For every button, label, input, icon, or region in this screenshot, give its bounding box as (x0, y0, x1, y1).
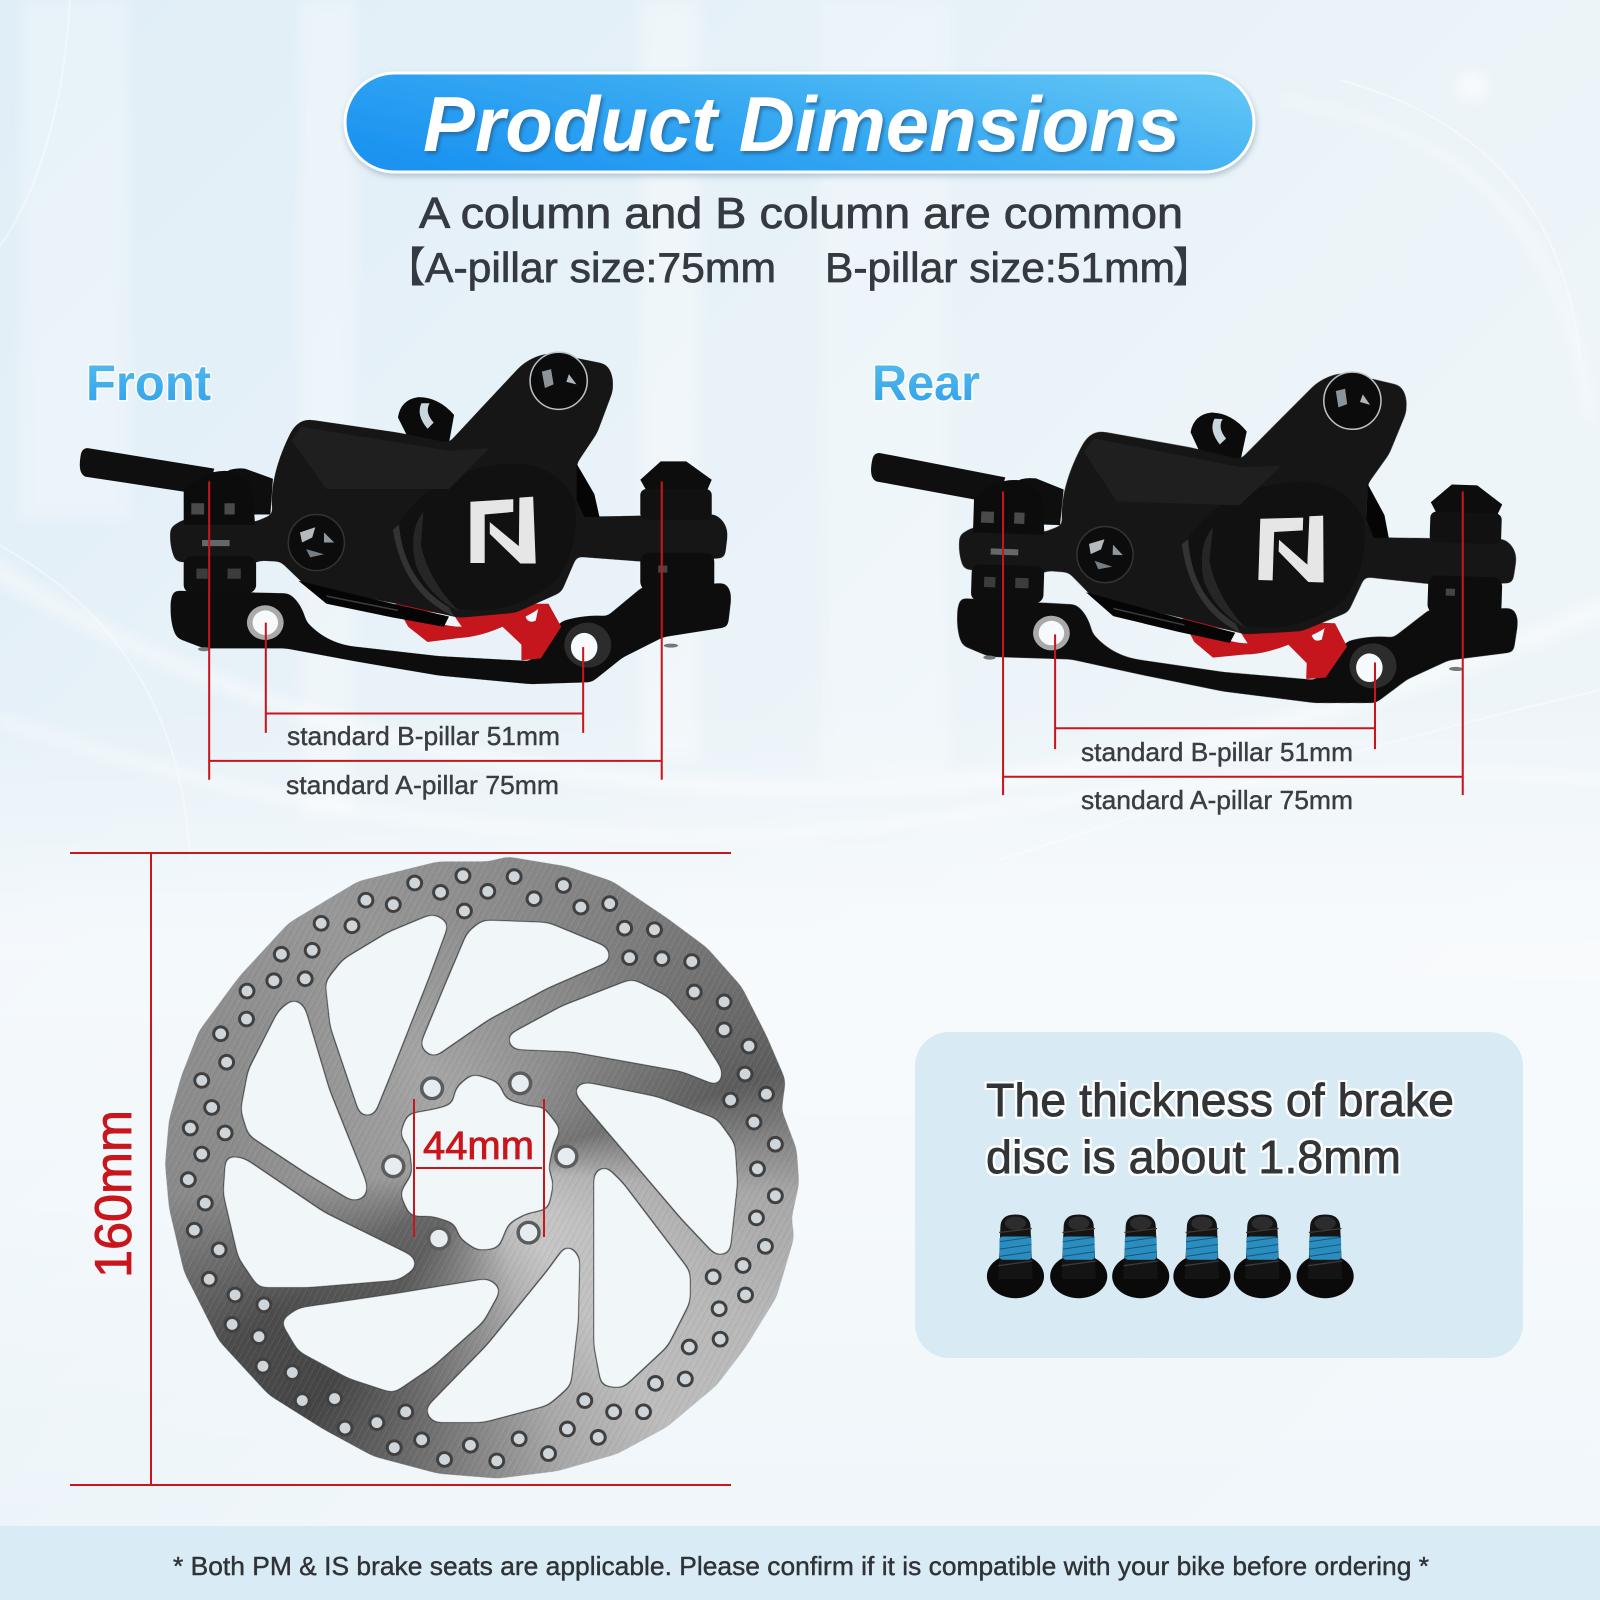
rear dimension lines (1003, 492, 1463, 795)
pillar sizes line: 【 (384, 244, 426, 291)
pillar sizes line (384, 244, 1214, 291)
pillar sizes line: 】 (1172, 244, 1214, 291)
footer band (0, 1526, 1600, 1600)
thickness text (986, 1074, 1454, 1183)
rear B-pillar label: standard B-pillar 51mm (1081, 737, 1353, 767)
44mm dimension lines (414, 1099, 544, 1237)
title: Product Dimensions (423, 80, 1180, 168)
label: Front: Front (86, 355, 211, 411)
front dimension lines (209, 481, 662, 780)
disc bolt holes (383, 1073, 577, 1249)
front A-pillar label: standard A-pillar 75mm (286, 770, 559, 800)
160mm dimension lines (70, 853, 731, 1485)
title banner (345, 73, 1254, 172)
rear brake caliper (864, 357, 1525, 709)
label: 44mm: 44mm (423, 1124, 534, 1168)
thickness text: disc is about 1.8mm (986, 1131, 1401, 1183)
panel: disc thickness and screws (915, 1032, 1523, 1358)
disc vent slots (224, 914, 737, 1422)
front B-pillar label: standard B-pillar 51mm (287, 721, 560, 751)
disc perforations (181, 869, 782, 1468)
pillar sizes line: A-pillar size:75mm (425, 244, 776, 291)
icon: six screws (987, 1215, 1354, 1298)
label: 160mm: 160mm (85, 1110, 143, 1278)
brake disc (150, 845, 816, 1493)
footer note: * Both PM & IS brake seats are applicable. Please confirm if it is compatible with your bike before ordering * (173, 1551, 1429, 1581)
label: Rear: Rear (872, 355, 980, 411)
pillar sizes line: B-pillar size:51mm (825, 244, 1175, 291)
thickness text: The thickness of brake (986, 1074, 1454, 1126)
rear A-pillar label: standard A-pillar 75mm (1081, 785, 1353, 815)
subtitle: A column and B column are common (419, 189, 1183, 238)
front brake caliper (80, 352, 731, 684)
